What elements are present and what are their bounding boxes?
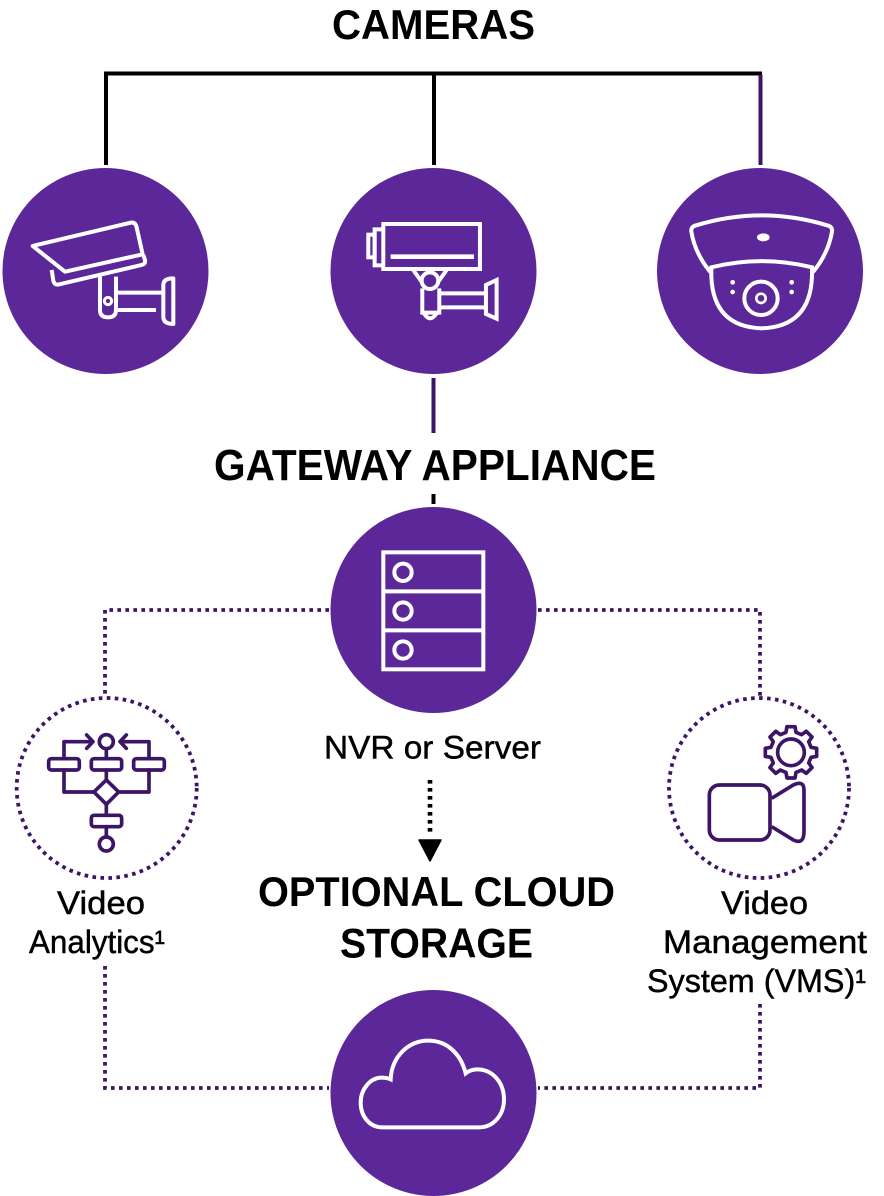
label: video management system: System (VMS)¹ bbox=[647, 963, 866, 999]
heading: optional cloud storage bbox=[258, 868, 615, 966]
icon: video camera with gear bbox=[709, 727, 817, 841]
panel: cloud circle bbox=[330, 990, 536, 1196]
connector: dotted links bbox=[105, 610, 760, 1088]
icon: box camera bbox=[368, 224, 497, 319]
heading: gateway appliance: GATEWAY APPLIANCE bbox=[214, 441, 656, 490]
label: video analytics bbox=[29, 885, 165, 960]
icon: server rack bbox=[383, 552, 483, 669]
icon: bullet camera bbox=[33, 223, 173, 324]
panel: video management system bbox=[669, 698, 849, 878]
panel: server circle bbox=[330, 507, 536, 713]
label: video management system: Management bbox=[663, 924, 867, 960]
connector: camera bus bbox=[106, 74, 762, 165]
icon: cloud bbox=[361, 1041, 504, 1127]
label: video management system bbox=[647, 885, 867, 999]
label: video analytics: Video bbox=[57, 885, 145, 921]
heading: optional cloud storage: STORAGE bbox=[340, 920, 533, 966]
label: video management system: Video bbox=[721, 885, 808, 921]
label: nvr or server: NVR or Server bbox=[324, 730, 541, 766]
connector: camera to gateway bbox=[432, 378, 436, 504]
label: video analytics: Analytics¹ bbox=[29, 924, 165, 960]
icon: flowchart bbox=[49, 735, 164, 851]
title: cameras: CAMERAS bbox=[332, 1, 535, 48]
heading: optional cloud storage: OPTIONAL CLOUD bbox=[258, 868, 615, 915]
panel: box camera circle bbox=[330, 168, 536, 374]
panel: bullet camera circle bbox=[2, 168, 208, 374]
panel: video analytics bbox=[17, 698, 197, 878]
panel: dome camera circle bbox=[657, 168, 863, 374]
arrow: server to cloud bbox=[419, 780, 441, 861]
icon: dome camera bbox=[691, 215, 832, 328]
